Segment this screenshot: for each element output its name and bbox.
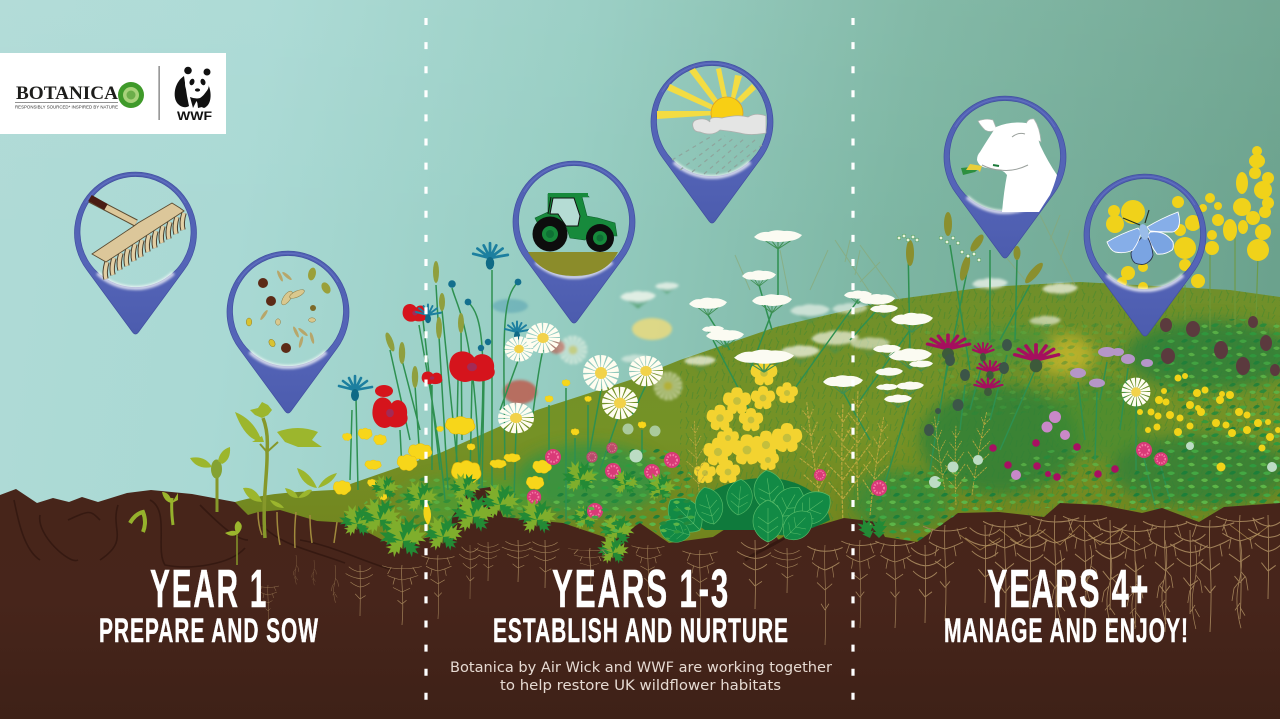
roots years 4 plus (841, 515, 1280, 632)
heading: year 1 (99, 559, 319, 650)
heading: years 1-3: ESTABLISH AND NURTURE (493, 612, 789, 650)
wwf panda logo (175, 67, 212, 123)
distant blurred flowers (492, 278, 1078, 404)
year 1 seedlings (130, 402, 337, 565)
botanica logo: BOTANICA (16, 83, 118, 104)
icon: seeds (246, 267, 332, 353)
botanica logo: RESPONSIBLY SOURCED* INSPIRED BY NATURE (15, 104, 118, 110)
soil ground (0, 487, 1280, 719)
roots year 1 (257, 555, 422, 625)
heading: years 4 plus (944, 559, 1189, 650)
partnership caption: Botanica by Air Wick and WWF are working together (450, 660, 832, 676)
partnership caption: to help restore UK wildflower habitats (500, 678, 781, 694)
flower stems (350, 245, 1170, 520)
daisies (505, 329, 1145, 427)
meadow hill (235, 282, 1280, 560)
wwf panda logo: WWF (177, 109, 212, 123)
pin: rake (74, 172, 196, 334)
soil clod contours (14, 500, 790, 570)
dashed divider right (851, 18, 855, 700)
pin: tractor (513, 161, 635, 323)
distant grasses (735, 215, 1075, 300)
white umbel flowers (689, 230, 933, 408)
pin: sheep (944, 96, 1066, 258)
yellow cowslip cluster (694, 360, 802, 483)
birdsfoot trefoil yellow cluster (1137, 373, 1280, 472)
knapweed thistles (924, 335, 1058, 436)
poppies (372, 304, 495, 428)
pin: sun and rain (651, 61, 773, 223)
botanica logo (15, 82, 144, 110)
scabious and campion flowers (989, 347, 1153, 481)
heading: years 1-3: YEARS 1-3 (552, 559, 730, 619)
logo panel (0, 53, 226, 134)
icon: sheep head (961, 119, 1057, 212)
jagged low leaves over soil (337, 458, 678, 566)
dashed divider left (424, 18, 428, 700)
pink clover heads (527, 424, 1277, 504)
pin: seeds (227, 251, 349, 413)
buttercups (333, 380, 646, 500)
heading: year 1: PREPARE AND SOW (99, 612, 319, 650)
yellow haze and green masses in the meadow (400, 320, 1280, 530)
partnership caption (450, 660, 832, 694)
olive grass heads (384, 261, 464, 388)
dark clover flowers (1160, 316, 1280, 376)
heading: years 1-3 (493, 559, 789, 650)
icon: sun cloud and rain (657, 68, 766, 174)
cornflowers and buds (339, 243, 530, 401)
icon: blue butterfly (1107, 210, 1180, 264)
icon: rake (90, 198, 184, 279)
roots years 1-3 (422, 540, 843, 645)
broad green basal leaves (657, 468, 838, 547)
tall yellow flower spikes (1106, 146, 1274, 330)
tan grass plumes (683, 390, 997, 523)
green groundcover above soil (560, 470, 1280, 541)
icon: tractor on field (528, 193, 618, 276)
pin: butterfly (1084, 174, 1206, 336)
heading: years 4 plus: YEARS 4+ (987, 559, 1150, 619)
dense meadow foliage (350, 319, 1280, 545)
heading: year 1: YEAR 1 (150, 559, 268, 619)
catkin grasses (897, 212, 1045, 286)
